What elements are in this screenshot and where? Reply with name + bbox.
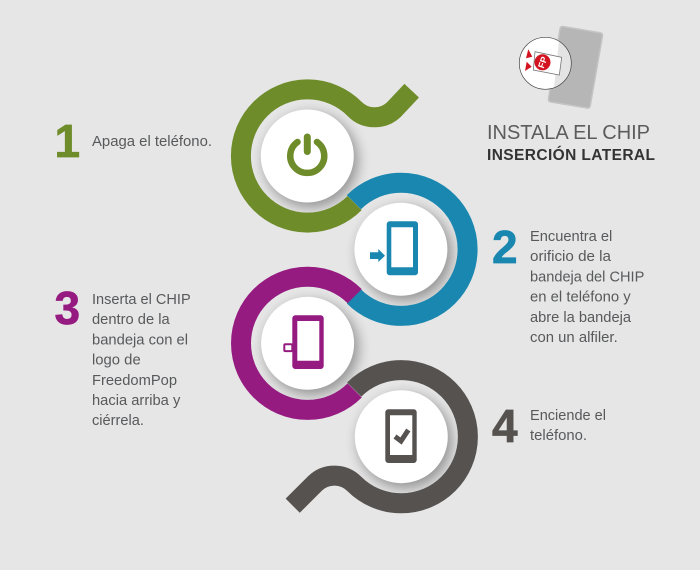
title: INSTALA EL CHIP (487, 122, 650, 144)
blue ribbon (354, 183, 468, 316)
number 2: 2 (492, 221, 518, 273)
step 3 text (92, 291, 191, 429)
step 3 text: logo de (92, 352, 141, 369)
step 3 text: dentro de la (92, 311, 170, 328)
step 4 text: Enciende el (530, 407, 606, 424)
icon: phone with check (385, 409, 417, 463)
step 4 text (530, 407, 606, 444)
step 3 disc (261, 297, 354, 390)
step 2 disc (354, 203, 447, 296)
step 2 text: con un alfiler. (530, 329, 618, 346)
purple ribbon (241, 277, 355, 410)
step 4 disc (355, 390, 448, 483)
icon: phone with arrow (370, 221, 418, 275)
icon: SIM magnifier (519, 37, 571, 89)
step 2 text: bandeja del CHIP (530, 268, 644, 285)
step 2 text: en el teléfono y (530, 289, 631, 306)
step 2 text: orificio de la (530, 248, 612, 265)
icon: phone with tray (284, 315, 324, 369)
step 3 text: Inserta el CHIP (92, 291, 191, 308)
number 4: 4 (492, 400, 518, 452)
number 1: 1 (54, 115, 80, 167)
icon: SIM magnifier: FP (536, 55, 549, 70)
step 2 text (530, 228, 644, 346)
icon: phone illustration (548, 26, 603, 108)
number 3: 3 (54, 282, 80, 334)
step 1 disc (261, 110, 354, 202)
icon: power (290, 137, 324, 173)
gray ribbon (293, 370, 468, 506)
step 1 text: Apaga el teléfono. (92, 133, 212, 150)
step 3 text: ciérrela. (92, 412, 144, 429)
step 4 text: teléfono. (530, 427, 587, 444)
circle shadows (264, 114, 452, 488)
step 3 text: hacia arriba y (92, 392, 181, 409)
step 2 text: abre la bandeja (530, 309, 632, 326)
subtitle: INSERCIÓN LATERAL (487, 146, 655, 164)
green ribbon (241, 89, 412, 223)
step 2 text: Encuentra el (530, 228, 612, 245)
step 3 text: FreedomPop (92, 372, 177, 389)
step 3 text: bandeja con el (92, 331, 188, 348)
